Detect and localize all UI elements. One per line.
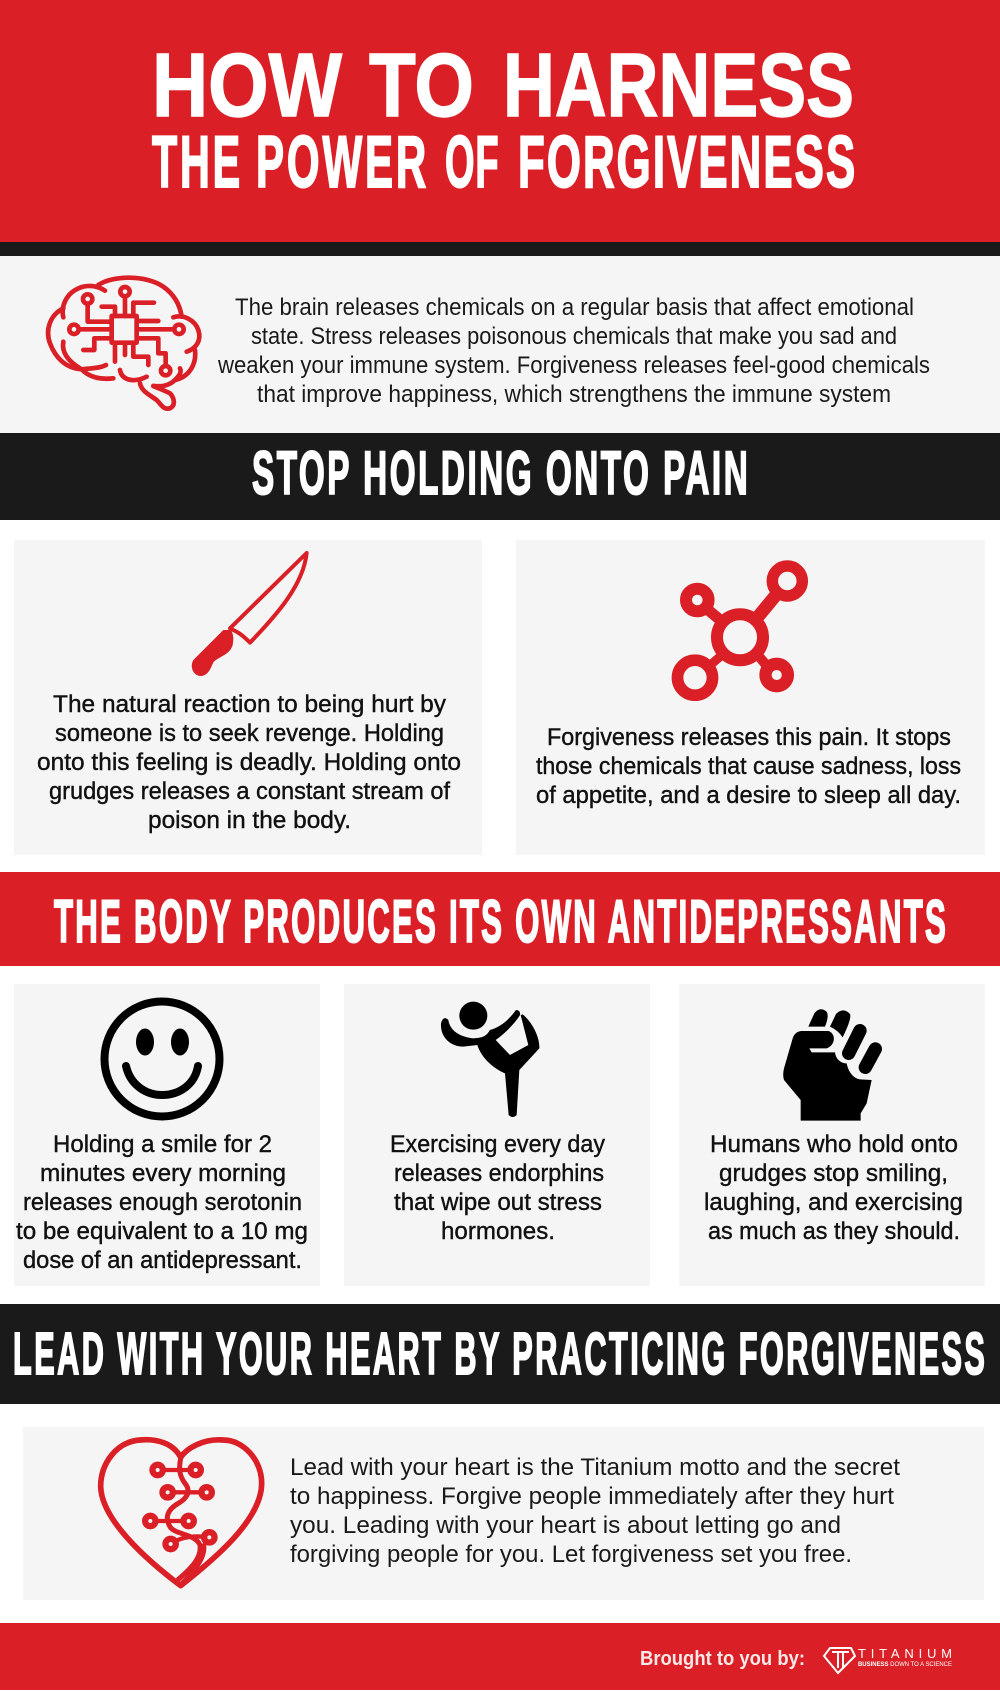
icon: yoga figure: [441, 1002, 539, 1117]
grudges text: [704, 1131, 963, 1245]
brought to you by: Brought to you by:: [640, 1648, 805, 1670]
revenge text: [37, 691, 461, 834]
smile text: [16, 1131, 308, 1274]
section band: antidepressants: [0, 872, 1000, 966]
title: OF: [445, 122, 499, 203]
icon: titanium logo: [824, 1648, 855, 1673]
panel: motto: [23, 1427, 984, 1600]
grudges text: grudges stop smiling,: [719, 1160, 948, 1187]
motto text: you. Leading with your heart is about letting go and: [290, 1512, 841, 1539]
panel: release: [516, 540, 985, 855]
motto text: to happiness. Forgive people immediately after they hurt: [290, 1483, 894, 1510]
exercise text: hormones.: [441, 1218, 555, 1245]
intro text: weaken your immune system. Forgiveness releases feel-good chemicals: [217, 352, 930, 379]
title: HOW: [152, 36, 342, 136]
revenge text: poison in the body.: [148, 807, 351, 834]
release text: of appetite, and a desire to sleep all day.: [536, 782, 961, 809]
icon: brain circuit: [48, 278, 199, 409]
release text: [536, 724, 961, 809]
title: TO: [369, 36, 474, 136]
revenge text: grudges releases a constant stream of: [49, 778, 450, 805]
release text: those chemicals that cause sadness, loss: [536, 753, 961, 780]
panel: smile: [14, 984, 320, 1286]
revenge text: onto this feeling is deadly. Holding onto: [37, 749, 461, 776]
icon: knife: [192, 553, 307, 676]
smile text: Holding a smile for 2: [53, 1131, 272, 1158]
title: HARNESS: [503, 36, 854, 136]
section band: lead with your heart: [0, 1304, 1000, 1404]
revenge text: someone is to seek revenge. Holding: [55, 720, 444, 747]
section band: stop holding onto pain: [0, 433, 1000, 520]
grudges text: laughing, and exercising: [704, 1189, 963, 1216]
title: POWER: [256, 121, 426, 203]
smile text: dose of an antidepressant.: [23, 1247, 302, 1274]
titanium wordmark: BUSINESS DOWN TO A SCIENCE: [858, 1662, 952, 1668]
panel: grudges: [679, 984, 985, 1286]
intro text: The brain releases chemicals on a regular basis that affect emotional: [235, 294, 914, 321]
smile text: releases enough serotonin: [23, 1189, 302, 1216]
exercise text: that wipe out stress: [394, 1189, 602, 1216]
titanium wordmark: TITANIUM: [858, 1646, 952, 1661]
heading: THE BODY PRODUCES ITS OWN ANTIDEPRESSANTS: [54, 889, 946, 956]
title: [152, 36, 855, 203]
smile text: to be equivalent to a 10 mg: [16, 1218, 308, 1245]
grudges text: Humans who hold onto: [710, 1131, 958, 1158]
intro text: that improve happiness, which strengthens the immune system: [257, 381, 891, 408]
title: FORGIVENESS: [518, 122, 855, 203]
footer: [0, 1623, 1000, 1690]
icon: smiley face: [104, 1002, 220, 1116]
revenge text: The natural reaction to being hurt by: [53, 691, 446, 718]
exercise text: Exercising every day: [390, 1131, 605, 1158]
heading: STOP HOLDING ONTO PAIN: [252, 439, 748, 508]
header banner: [0, 0, 1000, 256]
smile text: minutes every morning: [40, 1160, 286, 1187]
icon: molecule: [678, 566, 802, 695]
panel: revenge: [14, 540, 482, 855]
icon: stitched heart: [101, 1440, 262, 1586]
motto text: forgiving people for you. Let forgiveness set you free.: [290, 1541, 852, 1568]
icon: raised fist: [783, 1009, 875, 1121]
grudges text: as much as they should.: [708, 1218, 960, 1245]
motto text: Lead with your heart is the Titanium motto and the secret: [290, 1454, 900, 1481]
release text: Forgiveness releases this pain. It stops: [547, 724, 951, 751]
motto text: [290, 1454, 900, 1568]
title: THE: [152, 121, 240, 203]
intro text: state. Stress releases poisonous chemicals that make you sad and: [251, 323, 897, 350]
exercise text: releases endorphins: [394, 1160, 604, 1187]
titanium wordmark: [858, 1646, 952, 1668]
intro text: [217, 294, 930, 408]
exercise text: [390, 1131, 605, 1245]
heading: LEAD WITH YOUR HEART BY PRACTICING FORGIVENESS: [13, 1320, 985, 1387]
panel: intro: [0, 256, 1000, 433]
panel: exercise: [344, 984, 650, 1286]
